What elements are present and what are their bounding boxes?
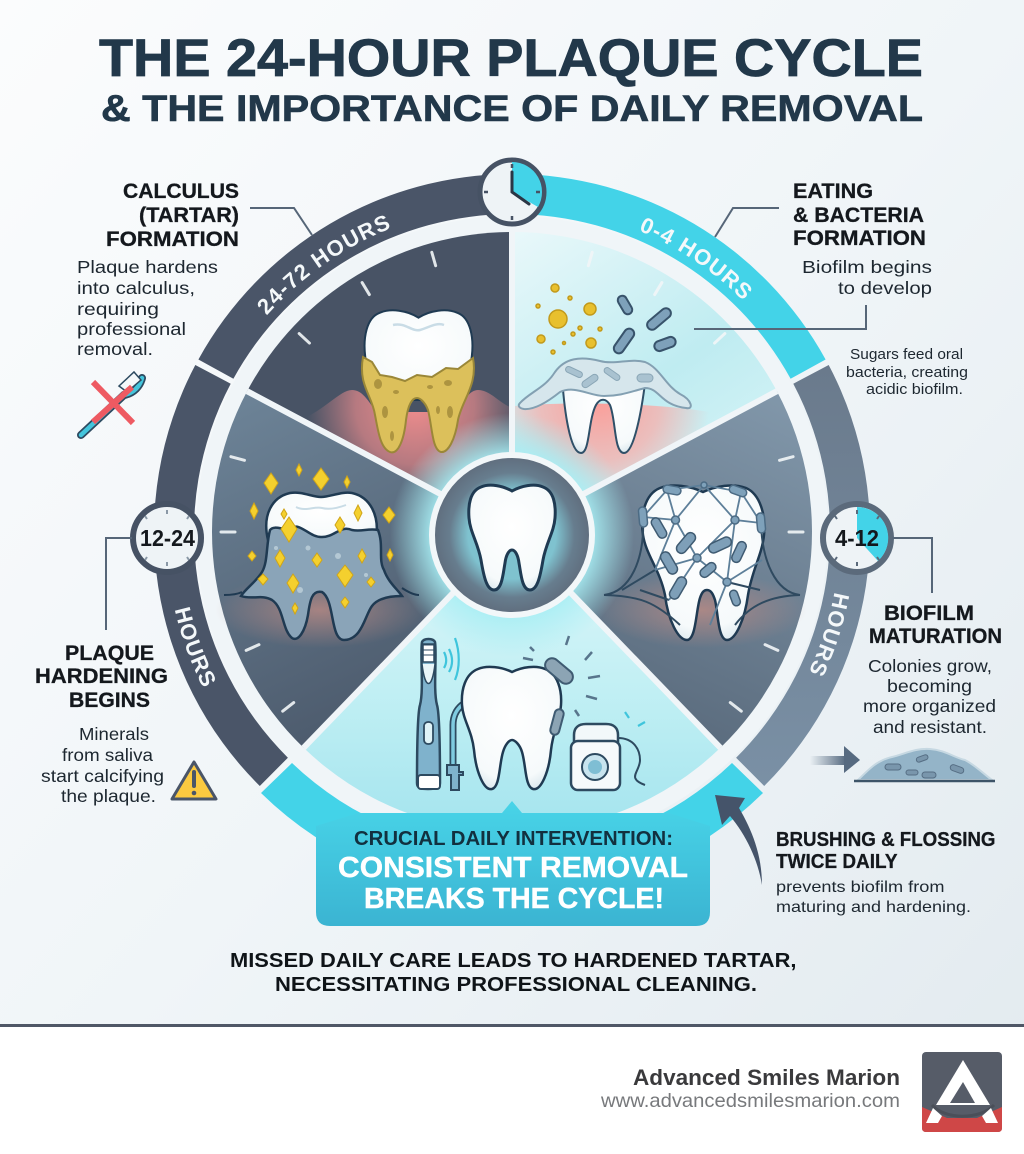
heading: BEGINS [69,689,150,712]
title: & THE IMPORTANCE OF DAILY REMOVAL [101,87,923,129]
description: becoming [887,676,972,696]
icon: crossed toothbrush [81,372,142,435]
heading: MATURATION [869,625,1002,648]
crown shine [296,505,346,509]
banner message [338,852,688,915]
icon: warning triangle [172,762,216,799]
tooth: calculus [362,310,474,452]
side note [846,347,968,398]
tooth: biofilm maturation net [597,482,807,648]
crown [365,310,472,400]
description: Plaque hardens [77,257,218,277]
leader line [106,538,132,630]
heading: CALCULUS [123,180,239,203]
sugar particles [536,284,602,354]
heading: HARDENING [35,665,168,688]
gum shadow [215,572,425,648]
footer [0,1024,1024,1154]
gum: calculus sector [312,390,509,490]
warning statement: NECESSITATING PROFESSIONAL CLEANING. [275,973,757,996]
banner shape [316,801,710,926]
hardened plaque [241,527,402,640]
side note: acidic biofilm. [866,382,963,398]
gum shadow [597,572,807,648]
plaque film [519,359,691,409]
heading: FORMATION [793,227,926,250]
film bacteria [565,365,653,389]
description: and resistant. [873,717,987,737]
panel: calculus formation [77,180,312,435]
removal bursts [523,636,600,716]
central tooth [469,485,555,590]
central tooth hub [432,455,592,615]
clock ticks [484,164,540,220]
clock: 4-12 hours: 4-12 [835,525,879,551]
heading [793,180,926,250]
ring segment: 12-24 hours [154,365,288,786]
description: more organized [863,696,996,716]
water flosser [447,695,482,790]
net nodes [638,482,766,586]
icon: arrow to biofilm [810,746,860,773]
callout banner [316,801,710,926]
description [77,257,218,359]
heading: & BACTERIA [793,204,924,227]
ring segment: daily intervention [261,763,763,896]
clock: top [480,160,544,224]
heading: BIOFILM [884,602,974,625]
description [776,879,971,916]
tartar [362,357,474,452]
gum: bacteria sector [515,404,702,487]
heading: EATING [793,180,873,203]
outer web threads [604,517,800,625]
cycle wheel [155,175,869,838]
side note: bacteria, creating [846,365,968,381]
roots [562,375,646,453]
heading: TWICE DAILY [776,850,898,873]
side note: Sugars feed oral [850,347,963,363]
description: professional [77,319,186,339]
description: Minerals [79,724,149,744]
ring label: hours right: HOURS [810,593,850,676]
sector ticks [221,252,803,711]
heading [776,828,996,873]
wheel base disc [196,216,828,848]
description: removal. [77,339,153,359]
inner web threads [643,485,762,625]
sector: biofilm maturation [512,391,812,748]
tooth: early biofilm with sugars and bacteria [519,284,691,453]
plaque specks [274,546,368,593]
floss box [571,712,645,790]
mineral crystals [248,464,395,614]
tartar spots [374,379,453,441]
sector separators [247,232,777,748]
icon: biofilm mound [854,749,995,781]
electric toothbrush [417,638,459,789]
logo [922,1052,1002,1132]
tooth body [642,485,764,640]
clock hands [512,172,529,204]
brand url: www.advancedsmilesmarion.com [600,1090,900,1112]
ring label: 24-72 hours: 24-72 HOURS [258,216,390,315]
panel: brushing and flossing [776,828,996,916]
leader line to bacteria [694,305,866,329]
crown [266,493,377,540]
ring segment: 4-12 hours [736,365,870,786]
leader line [715,208,779,237]
ring label: 0-4 hours: 0-4 HOURS [641,218,752,298]
heading: BRUSHING & FLOSSING [776,828,996,851]
warning statement: MISSED DAILY CARE LEADS TO HARDENED TARTAR, [230,949,796,972]
title [99,29,923,129]
clock: 12-24 hours: 12-24 [140,525,195,551]
brand name: Advanced Smiles Marion [633,1065,900,1090]
banner message: BREAKS THE CYCLE! [364,883,664,915]
hub glow [390,413,634,657]
ring segment: 0-4 hours [512,174,826,379]
sector: plaque hardening [212,391,512,748]
sector: eating and bacteria [512,232,777,532]
gum lines [224,588,419,595]
daily care tools [417,636,645,790]
clock: 12-24 hours [133,504,201,572]
leader line [892,538,932,593]
sector: calculus [247,232,512,532]
clock slice [512,162,542,207]
panel: eating and bacteria formation [694,180,968,398]
title: THE 24-HOUR PLAQUE CYCLE [99,29,923,88]
warning statement [230,949,796,996]
heading: PLAQUE [65,642,154,665]
description: into calculus, [77,278,195,298]
leader line [250,208,312,235]
bacteria being removed [542,655,576,736]
description: requiring [77,299,159,319]
heading: (TARTAR) [139,204,239,227]
clean tooth [462,667,561,789]
heading: FORMATION [106,228,239,251]
heading [106,180,239,251]
description [863,656,996,737]
description: start calcifying [41,766,164,786]
hub disc [432,455,592,615]
description: the plaque. [61,786,156,806]
crown shine [393,324,444,330]
panel: plaque hardening begins [35,538,216,806]
panel: biofilm maturation [810,538,1002,781]
sector: daily removal [304,532,720,832]
description: from saliva [62,745,153,765]
description: maturing and hardening. [776,899,971,916]
heading [35,642,168,712]
description: Colonies grow, [868,656,992,676]
description: Biofilm begins [802,257,932,277]
description [802,257,932,298]
ring segment: 24-72 hours [198,174,512,379]
description: to develop [838,278,932,298]
banner heading: CRUCIAL DAILY INTERVENTION: [354,827,673,850]
description: prevents biofilm from [776,879,944,896]
description [41,724,164,806]
colony bacteria [650,516,748,607]
tooth: plaque hardening [215,464,425,648]
bacteria [612,294,677,355]
ring label: hours left: HOURS [175,607,215,686]
curved arrow [715,795,762,885]
banner message: CONSISTENT REMOVAL [338,852,688,884]
heading [869,602,1002,648]
clock: 4-12 hours [823,504,891,572]
